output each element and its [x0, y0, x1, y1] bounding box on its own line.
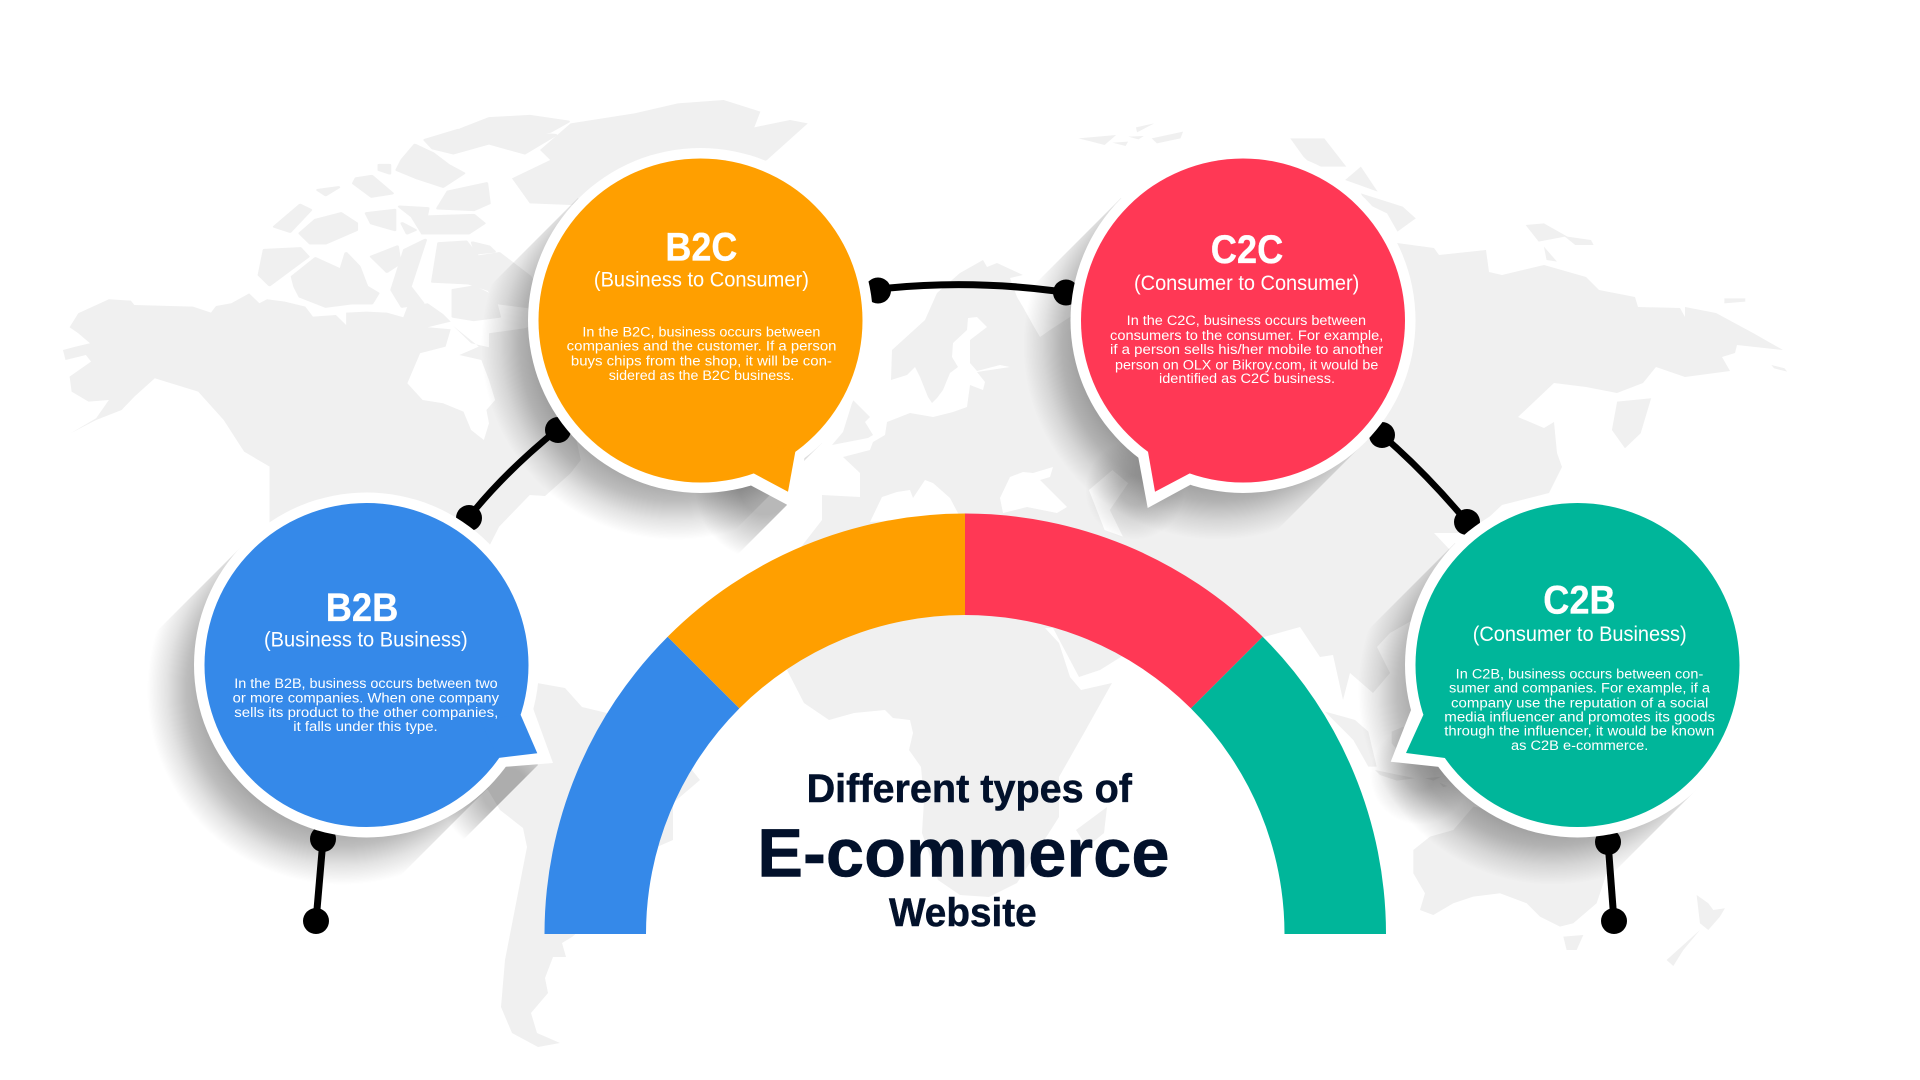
heading: B2B — [326, 586, 398, 630]
gauge segment: blue — [544, 637, 739, 934]
map: southeast asia, australia and new zealand — [1325, 712, 1725, 966]
heading: C2C — [1211, 228, 1283, 272]
description: sumer and companies. For example, if a — [1449, 680, 1711, 695]
description: it falls under this type. — [293, 719, 438, 734]
main title — [757, 767, 1170, 935]
description: or more companies. When one company — [233, 690, 499, 705]
map: canadian arctic islands — [259, 116, 568, 320]
subtitle: (Business to Consumer) — [594, 268, 809, 292]
subtitle: (Business to Business) — [264, 628, 468, 652]
description — [233, 676, 499, 734]
description: In the B2B, business occurs between two — [234, 676, 498, 691]
gauge segment: red — [965, 514, 1263, 708]
description: company use the reputation of a social — [1451, 695, 1708, 710]
description: sidered as the B2C business. — [609, 368, 794, 383]
infographic canvas — [63, 100, 1787, 1047]
panel: B2B bubble — [194, 492, 553, 838]
bubble body — [1070, 148, 1416, 508]
gauge segment: orange — [668, 514, 965, 708]
bubble body — [194, 492, 553, 838]
heading: C2B — [1543, 578, 1616, 622]
description: buys chips from the shop, it will be con- — [571, 354, 832, 369]
title line 3: Website — [889, 891, 1037, 935]
map: europe, asia and africa — [760, 230, 1783, 897]
connector: B2C to C2C — [865, 278, 1079, 306]
bubble body — [528, 148, 873, 510]
connector: B2B to B2C — [456, 417, 571, 531]
title line 1: Different types of — [807, 767, 1133, 811]
map: arctic russian islands — [1078, 123, 1787, 448]
description: identified as C2C business. — [1159, 371, 1335, 386]
description — [567, 325, 836, 383]
map: great britain — [832, 400, 873, 445]
map: madagascar — [1076, 807, 1107, 847]
gauge segment: teal — [1191, 637, 1386, 934]
description: In C2B, business occurs between con- — [1456, 666, 1703, 681]
panel: C2B bubble — [1391, 492, 1750, 838]
connector: C2C to C2B — [1369, 422, 1480, 535]
map: inland seas — [870, 467, 1128, 537]
subtitle: (Consumer to Business) — [1473, 622, 1687, 646]
description: media influencer and promotes its goods — [1444, 709, 1715, 724]
description: In the C2C, business occurs between — [1127, 313, 1366, 328]
description: companies and the customer. If a person — [567, 339, 836, 354]
description: sells its product to the other companies, — [234, 705, 498, 720]
bubble cast shadows — [147, 150, 1748, 885]
map: north america — [63, 100, 808, 557]
panel: C2C bubble — [1070, 148, 1416, 508]
map: south america — [450, 683, 700, 1047]
description — [1444, 666, 1715, 753]
connector: B2B stem — [303, 826, 336, 934]
heading: B2C — [665, 226, 737, 270]
description: through the influencer, it would be known — [1444, 723, 1714, 738]
bubble body — [1391, 492, 1750, 838]
subtitle: (Consumer to Consumer) — [1134, 271, 1359, 295]
world map background — [63, 100, 1787, 1047]
description: as C2B e-commerce. — [1511, 738, 1648, 753]
description: In the B2C, business occurs between — [582, 325, 820, 340]
description — [1110, 313, 1384, 386]
semicircle gauge — [544, 514, 1386, 934]
description: consumers to the consumer. For example, — [1110, 328, 1383, 343]
panel: B2C bubble — [528, 148, 873, 510]
connector: C2B stem — [1595, 829, 1627, 934]
description: if a person sells his/her mobile to another — [1110, 342, 1384, 357]
description: person on OLX or Bikroy.com, it would be — [1115, 357, 1378, 372]
title line 2: E-commerce — [757, 815, 1170, 892]
